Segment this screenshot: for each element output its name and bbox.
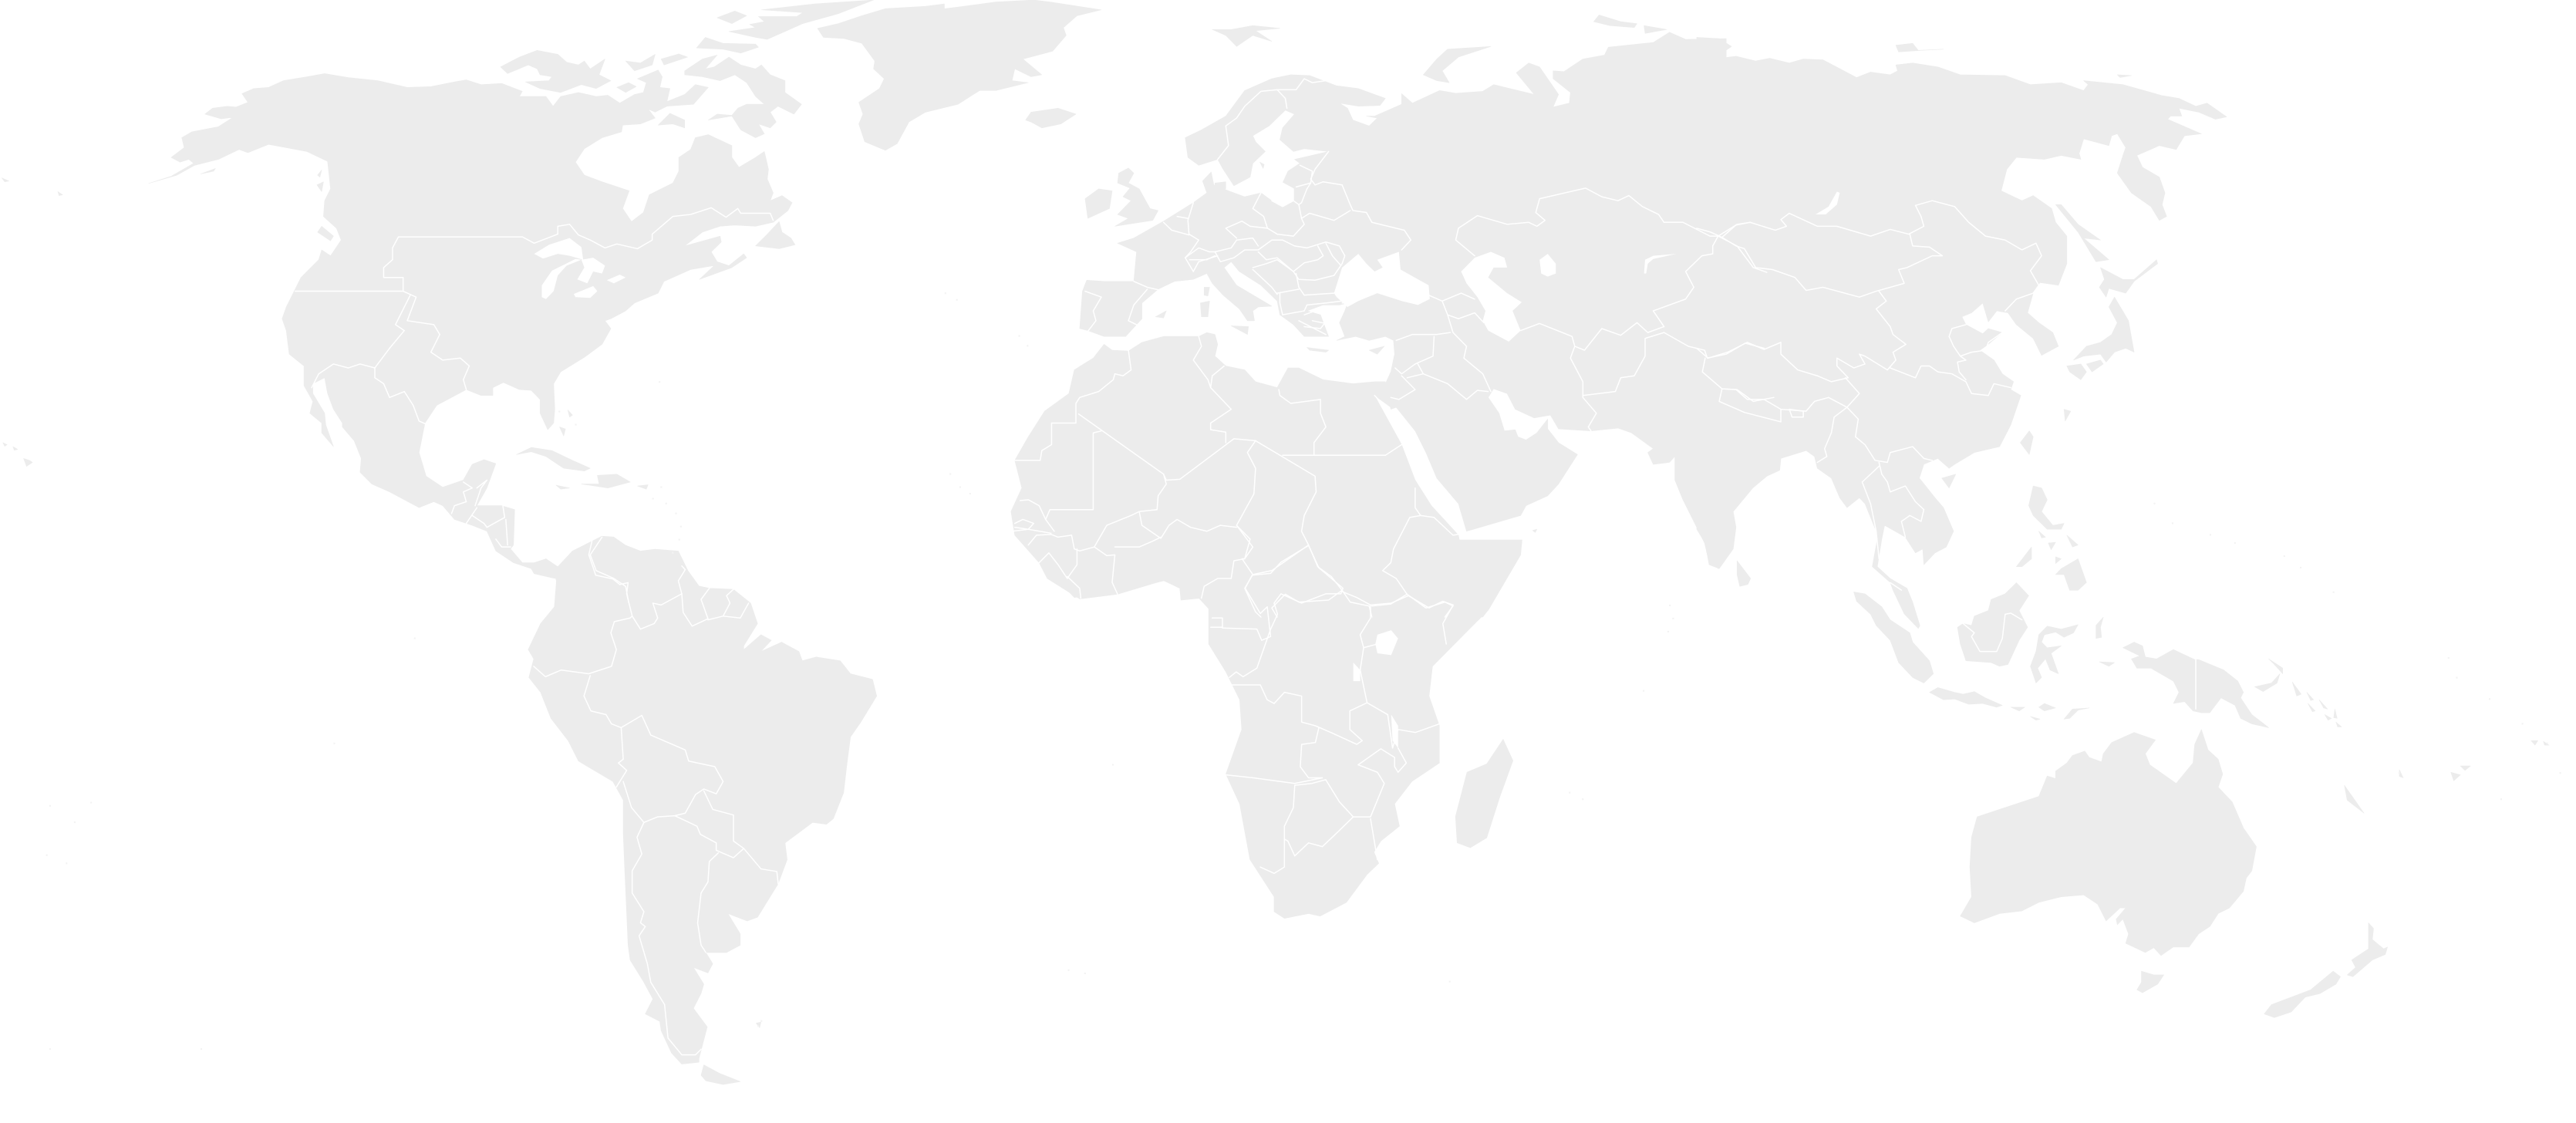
- landmass: North America and Arctic islands: [2, 0, 944, 578]
- country borders: Europe, Middle East, Central Asia, northern Africa: [1012, 79, 1774, 617]
- landmass: northern Africa: [1011, 332, 1521, 617]
- landmass: Madagascar: [1455, 740, 1513, 848]
- landmass: Greenland east: [909, 0, 1101, 114]
- country borders: North and Central America: [295, 207, 774, 602]
- landmass: South America and southern Africa: [528, 536, 1522, 1084]
- country borders: Borneo, New Guinea and Malay Peninsula: [1890, 582, 2196, 709]
- landmass: Europe, Western Asia and India: [1026, 15, 1751, 586]
- country borders: South America and southern Africa: [534, 540, 1453, 1055]
- water: Black Sea, Caspian Sea, Aral Sea, Balkhash: [1334, 252, 1677, 342]
- water: Lake Baikal: [1816, 191, 1839, 214]
- small oceanic islands: [46, 292, 2561, 1050]
- water: African Great Lakes: [1354, 630, 1398, 748]
- landmass: Southeast Asia islands and Oceania: [1854, 582, 2549, 1017]
- country borders: East and Southeast Asia: [1697, 201, 2042, 558]
- landmass: East Asia: [1697, 37, 2227, 629]
- water: Great Lakes: [534, 238, 625, 299]
